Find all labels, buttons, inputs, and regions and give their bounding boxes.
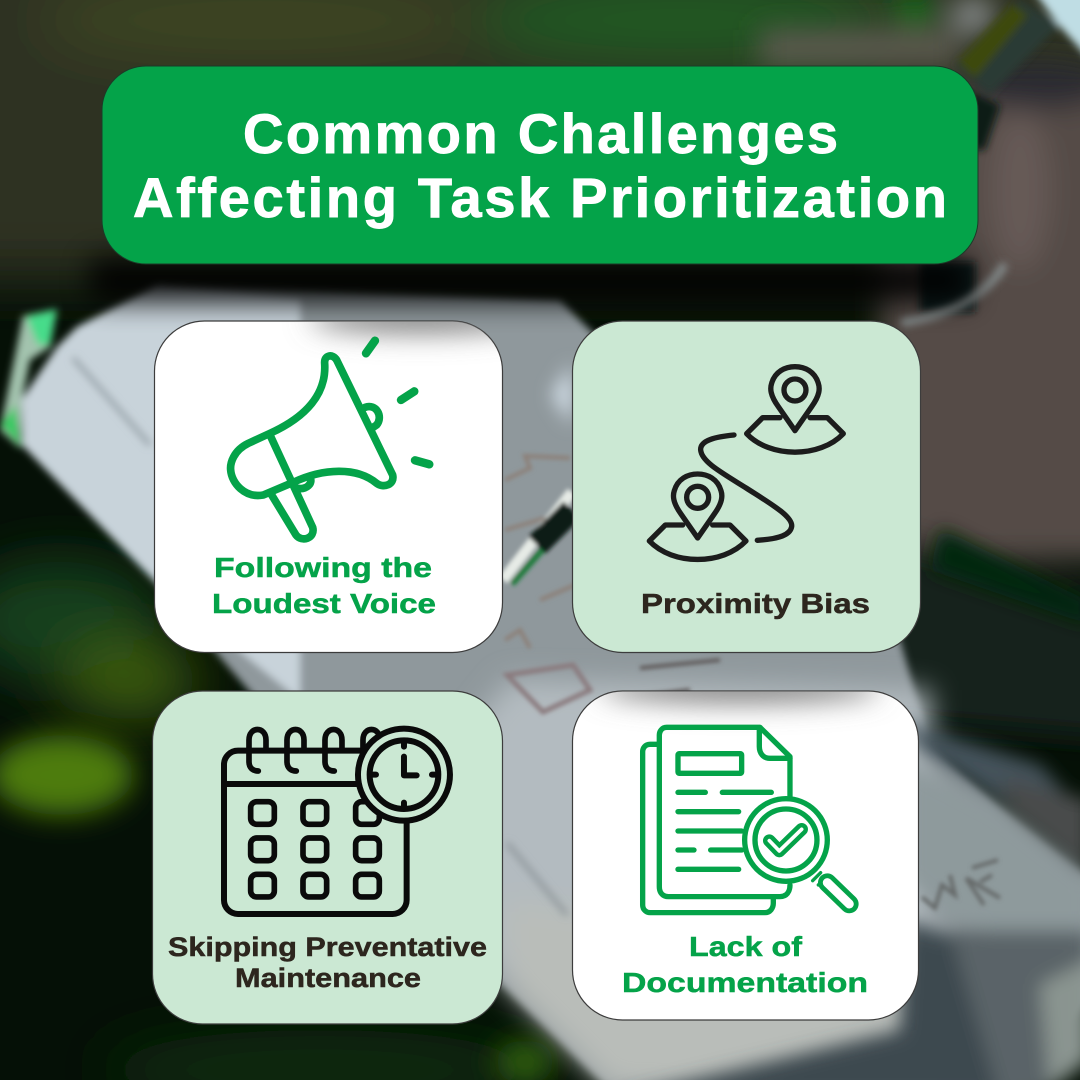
dark area beneath pen (970, 90, 1000, 150)
label: Documentation (622, 967, 868, 998)
paper main (22, 285, 1080, 1080)
hand highlight (905, 267, 1003, 322)
icon: documents with magnifier (643, 727, 849, 913)
pen over notebook (503, 492, 572, 580)
label: Proximity Bias (641, 588, 870, 619)
handwriting on notebook (507, 665, 590, 712)
title text: Common Challenges (243, 102, 838, 165)
label (168, 932, 487, 993)
label: Maintenance (235, 963, 421, 993)
title text (133, 102, 947, 229)
dark shadow behind title (920, 262, 975, 312)
fold lines (73, 358, 150, 445)
icon: map pins and route (649, 367, 843, 559)
hand (880, 90, 1080, 560)
white spot near panel (552, 363, 572, 425)
label: Following the (214, 552, 432, 583)
icon: calendar with clock (224, 729, 450, 914)
icon: megaphone (231, 341, 429, 539)
title text: Affecting Task Prioritization (133, 166, 947, 229)
panel: following the loudest voice (154, 320, 504, 654)
shadow below title (90, 258, 970, 302)
pen on right side (955, 0, 1060, 95)
label: Lack of (689, 931, 803, 962)
dark green below hand edge (930, 528, 1080, 625)
dark region below hand (880, 530, 1080, 740)
title banner (102, 66, 978, 264)
label (622, 931, 868, 998)
label: Loudest Voice (212, 588, 436, 619)
mint tab (0, 309, 57, 448)
panel: skipping preventative maintenance (152, 691, 502, 1024)
label (212, 552, 436, 619)
lower right paper (900, 720, 1080, 860)
panel: lack of documentation (572, 674, 918, 1020)
panel: proximity bias (572, 321, 920, 652)
label: Skipping Preventative (168, 932, 487, 962)
